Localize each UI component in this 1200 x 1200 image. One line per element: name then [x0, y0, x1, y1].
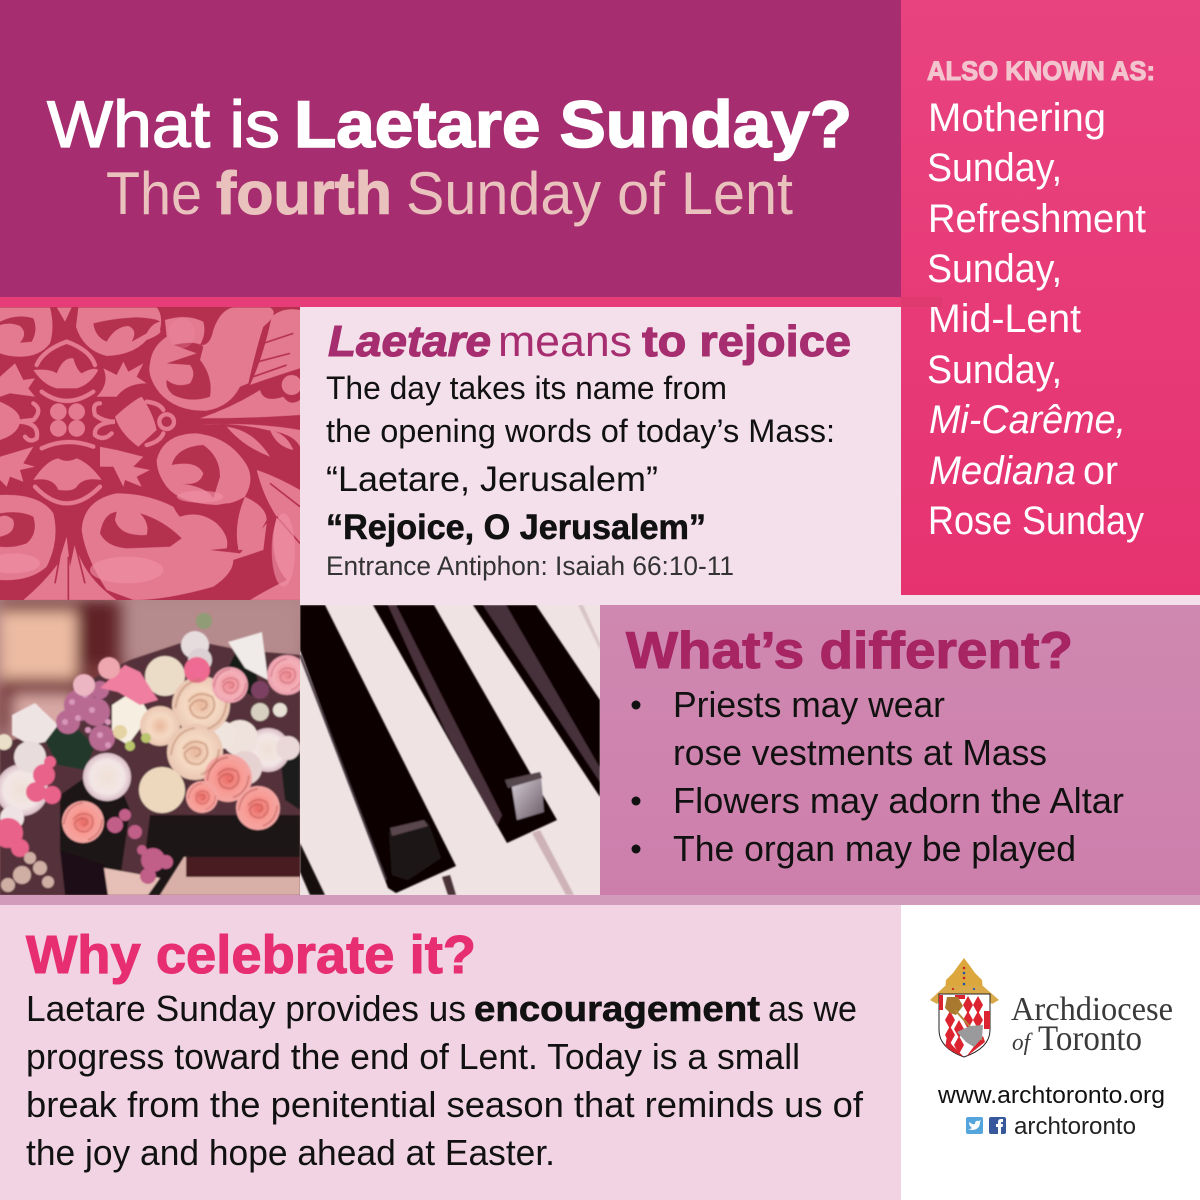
- list of alternative names: Refreshment: [928, 197, 1146, 241]
- logo wordmark: [1011, 991, 1173, 1058]
- body paragraph: progress toward the end of Lent. Today is a small: [26, 1036, 800, 1077]
- panel: also known as: [901, 0, 1200, 595]
- body text: name origin: Entrance Antiphon: Isaiah 66:10-11: [326, 551, 734, 581]
- website url: www.archtoronto.org: [937, 1082, 1165, 1109]
- body paragraph: the joy and hope ahead at Easter.: [26, 1132, 555, 1173]
- body paragraph: as we: [768, 988, 857, 1029]
- list of alternative names: Mid-Lent: [928, 297, 1081, 341]
- heading: Laetare means to rejoice: means: [498, 317, 632, 366]
- body text: name origin: “Rejoice, O Jerusalem”: [326, 508, 706, 547]
- heading: what's different: What’s different?: [626, 622, 1073, 680]
- body paragraph: Laetare Sunday provides us: [26, 988, 466, 1029]
- bullet list: [632, 684, 1124, 869]
- icon: twitter: [966, 1117, 983, 1134]
- base mass behind blossoms: [0, 640, 300, 895]
- list of alternative names: Sunday,: [927, 146, 1062, 190]
- title: What is Laetare Sunday?: [47, 87, 852, 161]
- panel: archdiocese logo and contact: [901, 905, 1200, 1200]
- icon: facebook: [989, 1117, 1006, 1134]
- icon: coat of arms: [930, 958, 999, 1057]
- logo wordmark: of: [1012, 1030, 1033, 1056]
- heading: why celebrate it: Why celebrate it?: [26, 925, 476, 985]
- list of alternative names: or: [1083, 449, 1118, 493]
- list of alternative names: [927, 96, 1146, 543]
- dark foliage: [46, 728, 94, 770]
- bullet list: rose vestments at Mass: [673, 732, 1047, 773]
- subtitle: The fourth Sunday of Lent: fourth: [216, 160, 392, 227]
- list of alternative names: Sunday,: [927, 348, 1062, 392]
- subtitle: The fourth Sunday of Lent: Sunday of Lent: [406, 160, 793, 227]
- logo wordmark: Toronto: [1038, 1018, 1142, 1058]
- list of alternative names: Mi-Carême,: [929, 398, 1126, 442]
- list of alternative names: Rose Sunday: [928, 499, 1144, 543]
- hot pink blossoms: [0, 756, 61, 857]
- photo: organ keys: [300, 605, 600, 895]
- logo wordmark: Archdiocese: [1011, 991, 1173, 1028]
- body paragraph: encouragement: [474, 988, 760, 1029]
- medallion: [33, 358, 98, 388]
- body text: name origin: the opening words of today’s Mass:: [326, 413, 835, 449]
- panel: why celebrate it: [0, 905, 901, 1200]
- subtitle: The fourth Sunday of Lent: [106, 160, 793, 227]
- list of alternative names: Sunday,: [927, 247, 1062, 291]
- green buds: [113, 725, 151, 751]
- list of alternative names: Mediana: [929, 449, 1076, 493]
- title: What is Laetare Sunday?: What is: [47, 87, 280, 161]
- pink divider bar: [0, 297, 942, 307]
- pedestal: [160, 857, 300, 895]
- heading: also known as: ALSO KNOWN AS:: [927, 56, 1155, 86]
- photo: altar flowers: [0, 600, 307, 895]
- bullet list: The organ may be played: [673, 828, 1076, 869]
- panel: what's different: [600, 605, 1200, 895]
- panel: title banner: [0, 0, 901, 297]
- body paragraph: break from the penitential season that reminds us of: [26, 1084, 864, 1125]
- lilac clusters: [56, 681, 269, 751]
- heading: Laetare means to rejoice: Laetare: [328, 317, 491, 366]
- bullet list: Priests may wear: [673, 684, 945, 725]
- bullet list: Flowers may adorn the Altar: [673, 780, 1124, 821]
- roses: [172, 676, 230, 734]
- beige sprigs: [1, 852, 54, 892]
- heading: Laetare means to rejoice: [328, 317, 851, 366]
- heading: Laetare means to rejoice: to rejoice: [642, 317, 851, 366]
- photo: rose damask fabric: [0, 307, 302, 600]
- white blossoms: [12, 703, 58, 745]
- body text: name origin: “Laetare, Jerusalem”: [326, 460, 658, 499]
- body paragraph: [26, 988, 864, 1173]
- panel: Laetare means to rejoice: [300, 307, 901, 605]
- body text: name origin: [326, 370, 835, 581]
- social handle: archtoronto: [1014, 1113, 1136, 1140]
- list of alternative names: Mothering: [928, 96, 1106, 140]
- title: What is Laetare Sunday?: Laetare Sunday?: [294, 87, 852, 161]
- subtitle: The fourth Sunday of Lent: The: [106, 160, 202, 227]
- body text: name origin: The day takes its name from: [326, 370, 727, 406]
